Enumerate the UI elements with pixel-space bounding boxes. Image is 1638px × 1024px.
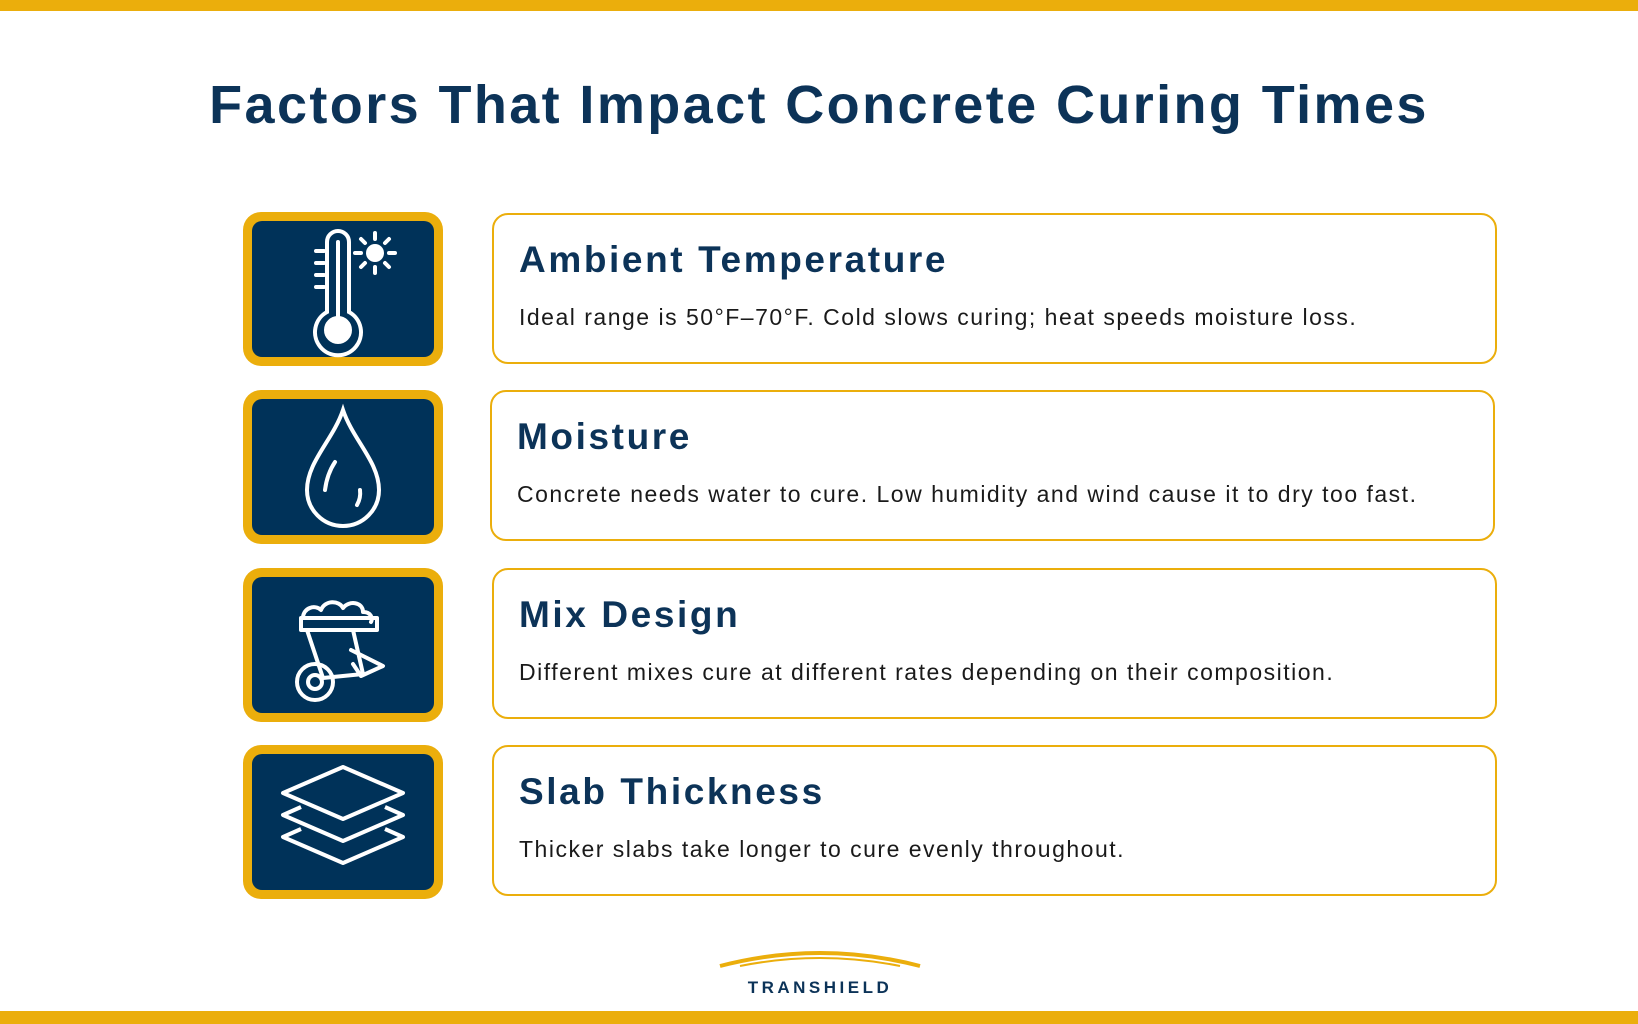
card: slab thickness xyxy=(492,745,1497,896)
card: ambient temperature: Ambient Temperature xyxy=(519,239,948,280)
card: mix design: Mix Design xyxy=(519,594,740,635)
card: moisture: Moisture xyxy=(517,416,692,457)
icon: water drop xyxy=(243,390,443,544)
card: ambient temperature: Ideal range is 50°F–70°F. Cold slows curing; heat speeds moisture loss. xyxy=(519,304,1357,330)
card: slab thickness: Thicker slabs take longer to cure evenly throughout. xyxy=(519,836,1125,862)
title: Factors That Impact Concrete Curing Times xyxy=(209,75,1429,135)
card: slab thickness: Slab Thickness xyxy=(519,771,825,812)
icon: layers xyxy=(243,745,443,899)
logo: Transhield: TRANSHIELD xyxy=(748,978,892,997)
card: mix design: Different mixes cure at different rates depending on their composition. xyxy=(519,659,1334,685)
card: moisture: Concrete needs water to cure. Low humidity and wind cause it to dry too fast. xyxy=(517,481,1417,507)
card: moisture xyxy=(490,390,1495,541)
icon: thermometer xyxy=(243,212,443,366)
card: ambient temperature xyxy=(492,213,1497,364)
card: mix design xyxy=(492,568,1497,719)
icon: concrete mixer cart xyxy=(243,568,443,722)
logo: Transhield xyxy=(720,951,920,997)
